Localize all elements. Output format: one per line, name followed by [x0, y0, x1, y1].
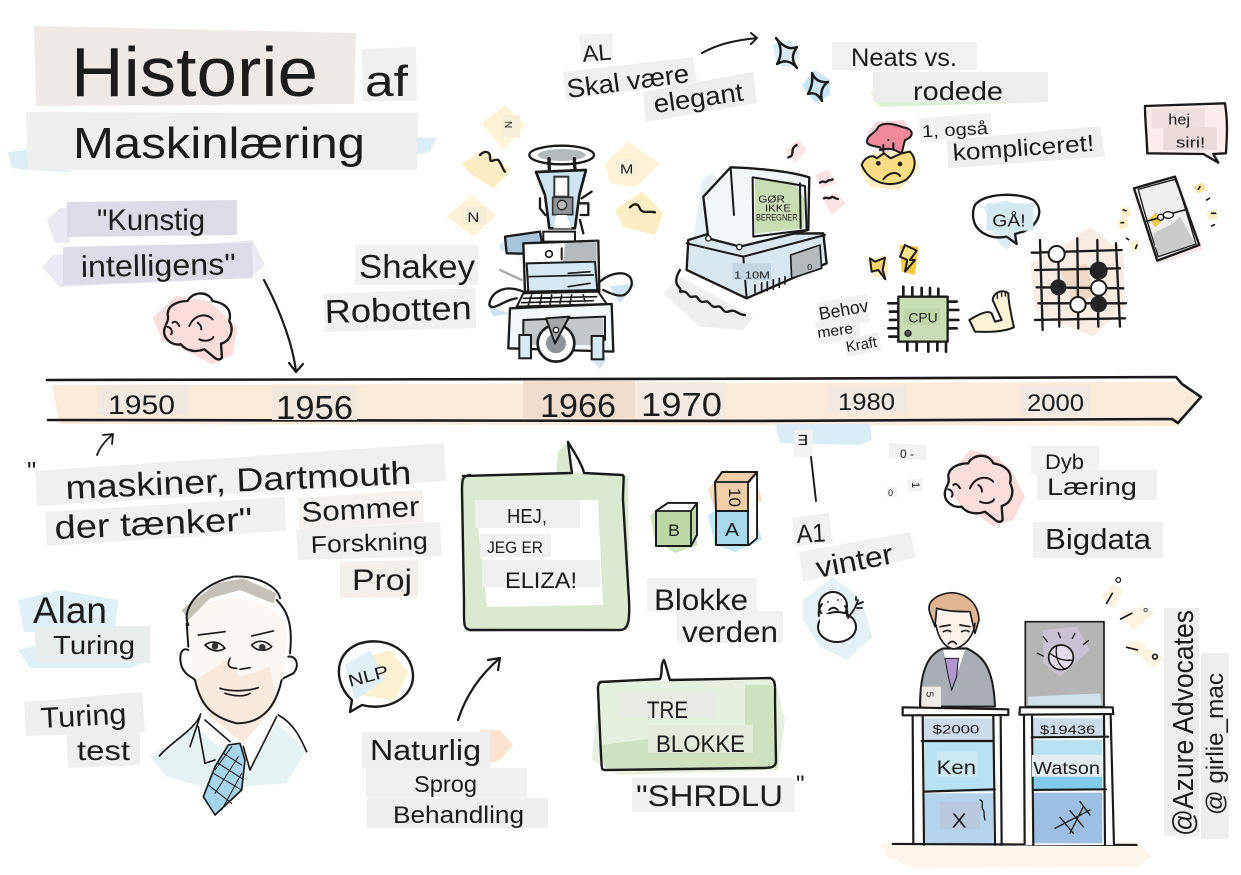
computer body: 0 [807, 262, 812, 272]
arrow: NLP to ELIZA [458, 658, 513, 765]
label: Turing test: Turing [40, 699, 127, 735]
marker: AI winter: ∃ [797, 432, 808, 448]
label: Blokke verden: Blokke [654, 584, 748, 617]
contestant: Watson [1025, 622, 1104, 707]
podium: Ken: X [952, 810, 967, 832]
icon: snowman [803, 577, 872, 660]
label: Sommer Forskning Proj: Forskning [310, 528, 428, 559]
computer body: BEREGNER [756, 213, 798, 223]
bubble: NLP: NLP [346, 662, 391, 691]
podium: Ken [893, 707, 1137, 845]
label: AL skal være elegant: elegant [652, 77, 746, 119]
label: AL skal være elegant: AL [581, 39, 613, 67]
podium: Watson: $19436 [1040, 723, 1096, 737]
label: Sommer Forskning Proj: Proj [352, 564, 412, 597]
icon: CPU chip [888, 287, 958, 352]
data bits: 1 [909, 482, 921, 488]
year labels: 1950 [108, 390, 175, 420]
arrow: to 1950 [97, 434, 113, 455]
label: Behov mere kraft: mere [816, 320, 854, 342]
label: Dyb Læring Bigdata: Bigdata [1045, 524, 1152, 556]
label: 1 også kompliceret [919, 113, 1105, 168]
icon: toy blocks: B [668, 521, 680, 540]
label: Alan Turing: Alan [33, 590, 107, 631]
bubble: ELIZA: HEJ, [507, 506, 547, 528]
label: SHRDLU: "SHRDLU [636, 780, 783, 813]
label: Kunstig intelligens: "Kunstig [97, 204, 205, 237]
year labels: 2000 [1027, 390, 1084, 417]
label: Turing test: test [77, 735, 130, 766]
title [8, 26, 436, 172]
icon: CPU chip: CPU [908, 310, 938, 326]
icon: exploding head [860, 120, 920, 190]
bubble: hej siri [1145, 103, 1227, 163]
label: Shakey Robotten: Shakey [359, 248, 476, 285]
label: Blokke verden [647, 578, 783, 649]
label: SHRDLU [632, 771, 805, 813]
label: Naturlig Sprog Behandling: Sprog [414, 771, 477, 797]
robot body [488, 146, 635, 369]
computer body: GØR [758, 195, 785, 206]
label: Naturlig Sprog Behandling [362, 732, 548, 829]
yellow washes: M [620, 161, 633, 176]
label: A1 vinter: A1 [796, 518, 826, 549]
label: Blokke verden: verden [682, 616, 778, 649]
label: 1 også kompliceret: 1, også [921, 118, 989, 141]
scene: Shakey robot [447, 105, 663, 369]
label: Shakey Robotten [323, 245, 478, 332]
label: Sommer Forskning Proj [296, 490, 442, 598]
bubble: SHRDLU: BLOKKE [656, 731, 745, 758]
year labels: 1956 [276, 389, 353, 426]
label: Sommer Forskning Proj: Sommer [301, 491, 420, 528]
bubble: ELIZA [460, 442, 630, 632]
year labels: 1966 [540, 387, 616, 424]
scene: Jeopardy Ken vs Watson [880, 578, 1163, 868]
icon: toy blocks: A [725, 520, 739, 540]
computer body [663, 167, 827, 330]
label: Neats vs. rodede [832, 42, 1048, 107]
label: Naturlig Sprog Behandling: Behandling [393, 802, 524, 829]
label: Shakey Robotten: Robotten [324, 289, 472, 330]
label: Kunstig intelligens: intelligens" [81, 248, 236, 284]
head explosion and label [860, 103, 1227, 352]
icon: toy blocks: 10 [725, 488, 744, 507]
label: Neats vs. rodede: Neats vs. [851, 44, 957, 72]
bubble: GÅ: GÅ! [992, 211, 1026, 231]
year patches [97, 381, 1090, 420]
label: maskiner der tænker Dartmouth: der tænker" [54, 500, 253, 546]
label: 1 også kompliceret: kompliceret! [952, 130, 1095, 166]
data bits: 0 - [900, 447, 914, 461]
label: A1 vinter [792, 513, 916, 585]
data bits [887, 443, 927, 498]
label: Behov mere kraft [815, 294, 882, 357]
podium: Ken: $2000 [933, 722, 980, 736]
credits: @ girlie_mac [1202, 673, 1229, 815]
label: AL skal være elegant [563, 33, 757, 122]
title: Historie [71, 33, 318, 111]
yellow washes [447, 105, 663, 237]
arrow: to sparkles [702, 33, 757, 53]
label: Behov mere kraft: Kraft [845, 334, 879, 356]
label: Kunstig intelligens [42, 200, 265, 287]
icon: toy blocks [650, 470, 762, 553]
label: Behov mere kraft: Behov [817, 296, 870, 324]
bubble: SHRDLU [592, 660, 785, 775]
year labels: 1980 [838, 389, 895, 416]
icon: Go board [1030, 227, 1126, 337]
contestant: Ken [920, 593, 995, 707]
scene: computer [663, 139, 846, 330]
label: Neats vs. rodede: rodede [913, 76, 1003, 106]
label: maskiner der tænker Dartmouth: " [27, 456, 36, 486]
portrait: Alan Turing [150, 577, 307, 815]
credits [1164, 608, 1229, 839]
label: maskiner der tænker Dartmouth [27, 443, 446, 546]
computer body: IKKE [765, 204, 791, 215]
label: Dyb Læring Bigdata [1031, 446, 1163, 558]
squiggles [785, 139, 846, 215]
title: Maskinlæring [73, 119, 365, 168]
arrow: to 1956 [264, 280, 303, 372]
label: AL skal være elegant: Skal være [565, 58, 691, 104]
icon: smartphone [1117, 175, 1218, 265]
bubble: SHRDLU: TRE [647, 697, 688, 724]
label: Dyb Læring Bigdata: Læring [1047, 474, 1137, 501]
data bits: 0 [888, 488, 893, 498]
icon: brain deep learning [945, 450, 1025, 527]
year labels [108, 386, 1084, 426]
icon: sparkles [773, 38, 830, 103]
label: Dyb Læring Bigdata: Dyb [1045, 451, 1084, 474]
yellow washes: N [502, 121, 513, 128]
label: SHRDLU: " [796, 771, 805, 798]
podium: Watson [1019, 707, 1114, 845]
label: Alan Turing: Turing [53, 630, 135, 660]
credits: @Azure Advocates [1168, 610, 1200, 836]
bubble: hej siri: siri! [1176, 135, 1205, 151]
bubble: NLP [339, 641, 413, 712]
icon: flexing arm [969, 291, 1014, 332]
title: af [365, 57, 409, 106]
bubble: ELIZA: ELIZA! [505, 568, 577, 593]
icon: lightning [867, 245, 918, 279]
label: Turing test [24, 692, 145, 768]
podium: Watson: Watson [1033, 758, 1100, 778]
label: Naturlig Sprog Behandling: Naturlig [370, 735, 481, 767]
year labels: 1970 [641, 386, 722, 423]
bubble: hej siri: hej [1168, 112, 1190, 128]
icon: brain top [153, 293, 238, 364]
bubble: ELIZA: JEG ER [487, 538, 543, 557]
label: A1 vinter: vinter [813, 539, 896, 585]
computer body: 1 10M [734, 270, 770, 281]
contestant: Ken: 5 [924, 692, 935, 698]
podium: Ken: Ken [937, 758, 976, 779]
label: maskiner der tænker Dartmouth: maskiner, Dartmouth [65, 454, 412, 506]
lightbulb rays [1102, 578, 1163, 668]
yellow washes: N [467, 209, 479, 225]
marker: AI winter [775, 424, 872, 501]
timeline band [47, 377, 1201, 426]
bubble: GÅ [973, 195, 1039, 250]
label: Alan Turing [18, 590, 150, 668]
